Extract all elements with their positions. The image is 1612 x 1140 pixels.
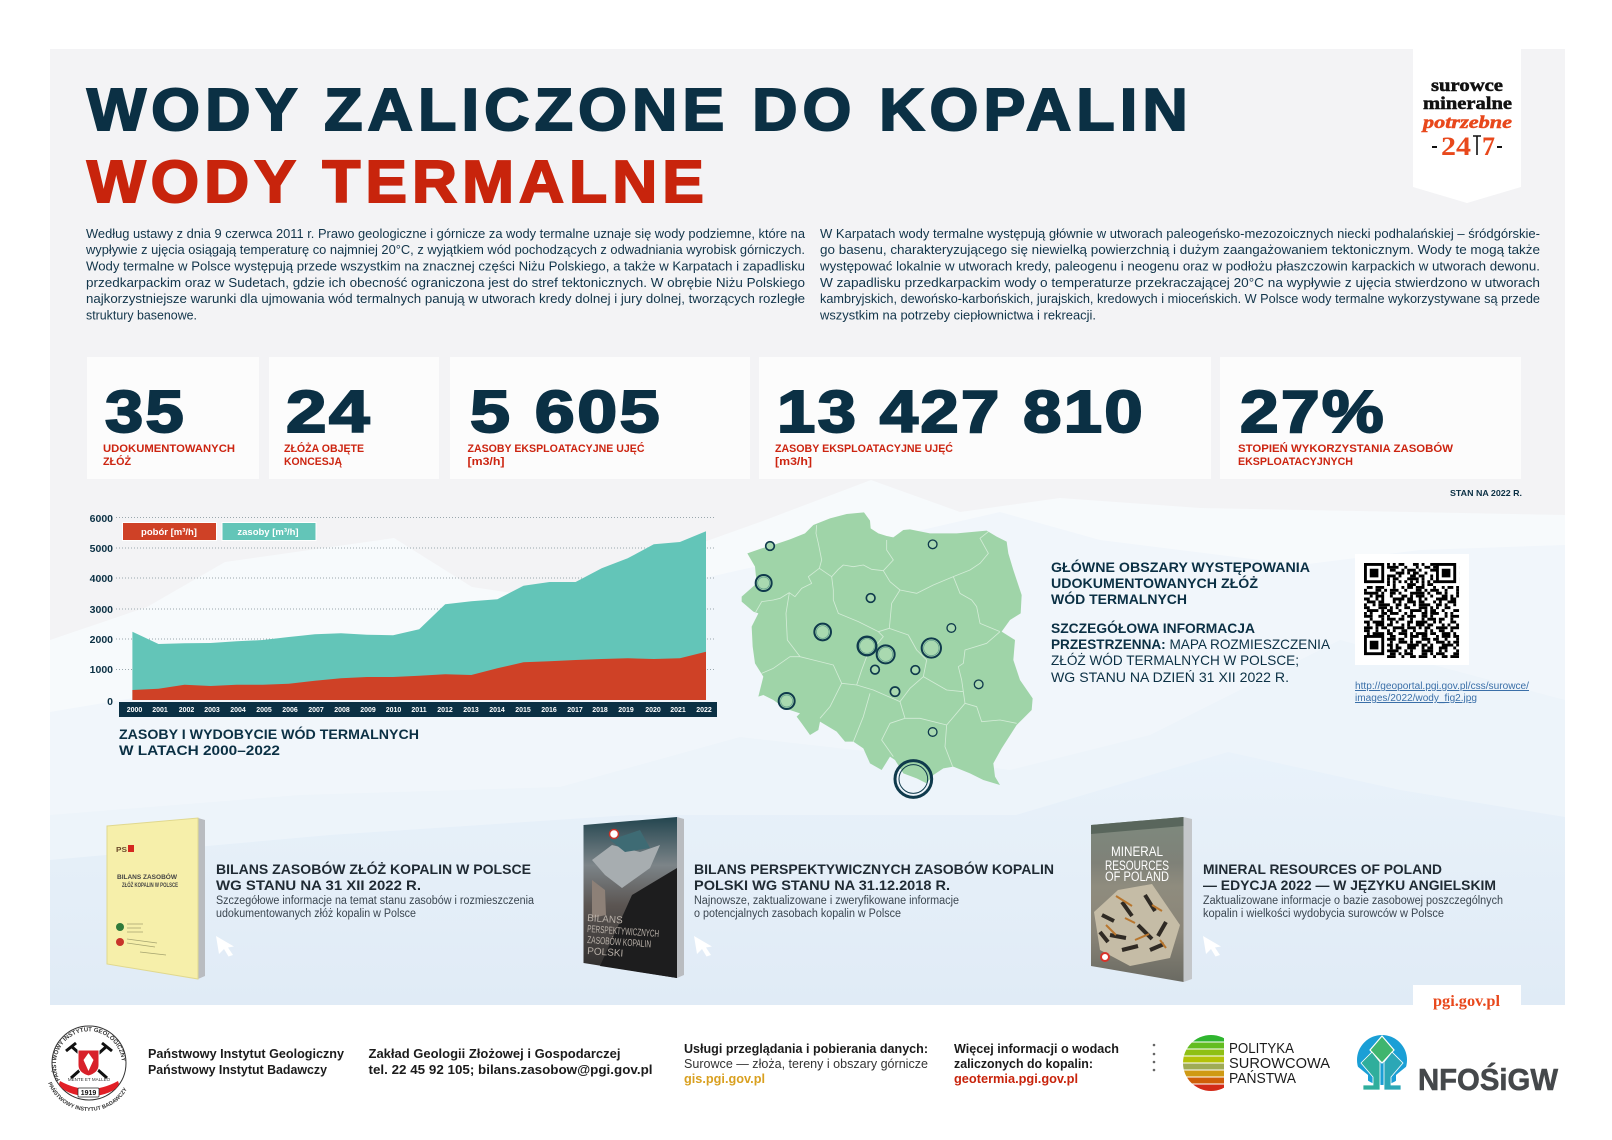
map description: UDOKUMENTOWANYCH ZŁÓŻ [1051, 574, 1258, 591]
stat card: 35: ZŁÓŻ [103, 455, 131, 468]
series: pobor [132, 652, 706, 700]
x axis band: 2002 [179, 707, 194, 714]
book 3 description: kopalin i wielkości wydobycia surowców w Polsce [1203, 908, 1444, 920]
legend [122, 522, 316, 540]
book 3: Mineral Resources of Poland: RESOURCES [1105, 858, 1169, 873]
title [87, 77, 1193, 215]
logo: Polityka Surowcowa Państwa [1180, 1035, 1330, 1092]
footer: department [368, 1047, 652, 1077]
stat card: 5 605: ZASOBY EKSPLOATACYJNE UJĘĆ [468, 442, 645, 455]
book 1 description [216, 860, 535, 920]
x axis band: 2001 [152, 707, 168, 714]
x axis band: 2016 [541, 707, 557, 714]
book 2 description: o potencjalnych zasobach kopalin w Polsce [694, 908, 901, 920]
stat card: 27%: EKSPLOATACYJNYCH [1238, 456, 1353, 468]
book 3 description: — EDYCJA 2022 — W JĘZYKU ANGIELSKIM [1203, 877, 1496, 893]
x axis band: 2006 [282, 707, 298, 714]
text block: left column [85, 227, 805, 322]
legend: pobór [m³/h] [141, 527, 197, 538]
footer: institute: Państwowy Instytut Geologiczny [148, 1047, 344, 1061]
text block: right column: występować lokalnie w utworach kredy, paleogenu i neogenu oraz w podłożu płaszczowin karpackich w utworach dewonu. [819, 260, 1540, 274]
tab: pgi.gov.pl [1413, 985, 1521, 1010]
x axis band: 2000 [127, 707, 142, 714]
logo: PGI emblem: 1919 [81, 1090, 96, 1097]
text block: right column: wszystkim na potrzeby ciepłownictwa i rekreacji. [819, 308, 1096, 322]
book 1: Bilans zasobów: ZŁÓŻ KOPALIN W POLSCE [122, 880, 178, 889]
book 1: Bilans zasobów: BILANS ZASOBÓW [117, 872, 178, 881]
stat card: 5 605 [450, 357, 750, 479]
logo: surowce mineralne potrzebne 24/7 bookmark: surowce [1431, 75, 1503, 95]
grid lines and y axis labels: 5000 [90, 543, 113, 555]
icon: cursor 3 [1203, 936, 1221, 956]
chart title: W LATACH 2000–2022 [119, 742, 280, 758]
map description: PRZESTRZENNA: MAPA ROZMIESZCZENIA [1051, 636, 1331, 652]
logo: PGI emblem: MENTE ET MALLEO [68, 1077, 111, 1082]
logo: Polityka Surowcowa Państwa: POLITYKA [1229, 1040, 1294, 1057]
stat card: 24: KONCESJĄ [284, 456, 342, 468]
book 1 description: BILANS ZASOBÓW ZŁÓŻ KOPALIN W POLSCE [216, 860, 531, 877]
stat card: 27%: STOPIEŃ WYKORZYSTANIA ZASOBÓW [1238, 442, 1454, 455]
footer: more info: zaliczonych do kopalin: [954, 1057, 1093, 1071]
map description: SZCZEGÓŁOWA INFORMACJA [1051, 619, 1255, 636]
text block: left column: przedkarpackim oraz w Sudetach, gdzie ich obecność ograniczona jest do stref tektonicznych. W obrębie Niżu Polskiego [86, 276, 805, 290]
chart title: ZASOBY I WYDOBYCIE WÓD TERMALNYCH [119, 725, 419, 742]
footer: institute [148, 1047, 344, 1077]
book 2: Bilans perspektywicznych: ZASOBÓW KOPALIN [587, 933, 652, 950]
logo: surowce mineralne potrzebne 24/7 bookmark: potrzebne [1421, 112, 1512, 132]
footer: data services: Surowce — złoża, tereny i obszary górnicze [684, 1057, 928, 1071]
footer: more info: geotermia.pgi.gov.pl [954, 1072, 1078, 1086]
text block: left column: wypływie z ujęcia osiągają temperaturę co najmniej 20°C, z wyjątkiem wód pochodzących z odwadniania wyrobisk górniczych. [85, 243, 805, 257]
map description: WÓD TERMALNYCH [1051, 590, 1187, 607]
book 3 description: Zaktualizowane informacje o bazie zasobowej poszczególnych [1203, 895, 1503, 907]
chart title [119, 725, 419, 758]
grid lines and y axis labels: 0 [107, 696, 113, 708]
logo: PGI emblem [48, 1026, 126, 1111]
text block: right column: W zapadlisku przedkarpackim wody o temperaturze przekraczającej 20°C na wypływie z ujęcia stwierdzono w utworach [820, 276, 1540, 290]
icon: cursor 1 [216, 936, 234, 956]
book 2 description: BILANS PERSPEKTYWICZNYCH ZASOBÓW KOPALIN [694, 860, 1054, 877]
footer: department: Zakład Geologii Złożowej i Gospodarczej [368, 1047, 620, 1061]
text block: left column: struktury basenowe. [86, 308, 197, 322]
footer: more info: Więcej informacji o wodach [954, 1042, 1119, 1056]
QR link [1355, 681, 1529, 704]
map of Poland [742, 512, 1033, 797]
book 2 description: Najnowsze, zaktualizowane i zweryfikowane informacje [694, 895, 959, 907]
logo: surowce mineralne potrzebne 24/7 bookmark: mineralne [1423, 93, 1512, 113]
stat card: 35: UDOKUMENTOWANYCH [103, 443, 235, 455]
x axis band: 2007 [308, 707, 324, 714]
logo: NFOŚiGW: NFOŚiGW [1418, 1061, 1559, 1097]
logo: Polityka Surowcowa Państwa: PAŃSTWA [1229, 1070, 1296, 1087]
stat card: 5 605: 5 605 [470, 379, 662, 445]
map markers [756, 540, 983, 797]
x axis band: 2021 [670, 707, 686, 714]
text block: left column: Wody termalne w Polsce występują przede wszystkim na znacznej części Niżu Polskiego, a także w Karpatach i zapadlisku [86, 260, 805, 274]
text block: right column [819, 227, 1540, 322]
text block: right column: kambryjskich, dewońsko-karbońskich, jurajskich, kredowych i mioceńskich. W Polsce wody termalne wykorzystywane są przede [820, 292, 1540, 306]
text block: left column: Według ustawy z dnia 9 czerwca 2011 r. Prawo geologiczne i górnicze za wody termalne uznaje się wody podziemne, które na [86, 227, 805, 241]
book 1 description: WG STANU NA 31 XII 2022 R. [216, 877, 421, 893]
footer: data services: gis.pgi.gov.pl [684, 1072, 765, 1086]
book 2 description [694, 860, 1054, 920]
x axis band: 2019 [618, 707, 634, 714]
book 2 description: POLSKI WG STANU NA 31.12.2018 R. [694, 877, 950, 893]
book 2: Bilans perspektywicznych: BILANS [587, 913, 623, 926]
text block: right column: W Karpatach wody termalne występują głównie w utworach paleogeńsko-mezozoicznych niecki podhalańskiej – śródgórskie- [820, 227, 1540, 241]
book 1: Bilans zasobów: PS [116, 847, 127, 854]
QR code [1355, 554, 1469, 665]
QR link: images/2022/wody_fig2.jpg [1355, 693, 1477, 704]
footer: more info [954, 1042, 1119, 1086]
logo: NFOŚiGW [1357, 1035, 1559, 1097]
stat card: 5 605: [m3/h] [468, 456, 505, 468]
logo: surowce mineralne potrzebne 24/7 bookmark: 7 [1482, 132, 1495, 161]
stat card: 27%: 27% [1240, 379, 1386, 445]
book 3 description: MINERAL RESOURCES OF POLAND [1203, 861, 1442, 877]
text block: right column: go basenu, charakteryzującego się niewielką powierzchnią i dużym zaangażowaniem tektonicznym. Wody te mogą także [820, 243, 1540, 257]
book 2: Bilans perspektywicznych: PERSPEKTYWICZNYCH [587, 924, 659, 940]
stat card: 24: ZŁÓŻA OBJĘTE [284, 442, 364, 455]
book 3: Mineral Resources of Poland: MINERAL [1111, 844, 1163, 859]
x axis band: 2014 [489, 707, 505, 714]
map description: WG STANU NA DZIEŃ 31 XII 2022 R. [1051, 669, 1289, 685]
book 1 description: udokumentowanych złóż kopalin w Polsce [216, 908, 416, 920]
stat card: 24: 24 [286, 379, 372, 445]
x axis band: 2013 [463, 707, 479, 714]
grid lines and y axis labels: 6000 [90, 513, 113, 525]
series: zasoby [132, 531, 706, 700]
title: WODY ZALICZONE DO KOPALIN [87, 77, 1193, 143]
book 2: Bilans perspektywicznych [584, 817, 684, 978]
grid lines and y axis labels: 1000 [90, 664, 113, 676]
map description: ZŁÓŻ WÓD TERMALNYCH W POLSCE; [1051, 651, 1299, 668]
logo: PGI emblem: PAŃSTWOWY INSTYTUT GEOLOGICZNY [51, 1027, 126, 1082]
x axis band: 2015 [515, 707, 531, 714]
background panel with mountains [50, 49, 1565, 1005]
x axis band: 2010 [386, 707, 401, 714]
book 2: Bilans perspektywicznych: POLSKI [587, 946, 624, 960]
x axis band [119, 702, 717, 717]
title: WODY TERMALNE [87, 149, 709, 215]
logo: surowce mineralne potrzebne 24/7 bookmark [1413, 49, 1521, 203]
x axis band: 2018 [592, 707, 608, 714]
map description [1051, 558, 1331, 685]
logo: surowce mineralne potrzebne 24/7 bookmark: 24 [1441, 132, 1471, 161]
icon: cursor 2 [694, 936, 712, 956]
x axis band: 2009 [360, 707, 376, 714]
stat card: 24 [269, 357, 439, 479]
stat card: 13 427 810: ZASOBY EKSPLOATACYJNE UJĘĆ [775, 442, 953, 455]
stat card: 13 427 810: 13 427 810 [777, 379, 1145, 445]
stat card: 35 [87, 357, 259, 479]
logo: Polityka Surowcowa Państwa: SUROWCOWA [1229, 1055, 1330, 1072]
legend: zasoby [m³/h] [237, 527, 299, 538]
area chart [90, 513, 717, 717]
x axis band: 2012 [437, 707, 453, 714]
grid lines and y axis labels: 2000 [90, 634, 113, 646]
x axis band: 2020 [645, 707, 661, 714]
logo: PGI emblem: PAŃSTWOWY INSTYTUT BADAWCZY [48, 1082, 126, 1111]
grid lines and y axis labels: 3000 [90, 604, 113, 616]
QR link: http://geoportal.pgi.gov.pl/css/surowce/ [1355, 681, 1529, 692]
map description: GŁÓWNE OBSZARY WYSTĘPOWANIA [1051, 558, 1310, 575]
book 3 description [1203, 861, 1503, 920]
footer: data services [684, 1042, 928, 1086]
stat card: 13 427 810: [m3/h] [775, 456, 812, 468]
grid lines and y axis labels: 4000 [90, 573, 113, 585]
footer: department: tel. 22 45 92 105; bilans.zasobow@pgi.gov.pl [368, 1063, 652, 1077]
stat card: 27% [1220, 357, 1521, 479]
book 3: Mineral Resources of Poland [1091, 817, 1192, 982]
x axis band: 2005 [256, 707, 272, 714]
x axis band: 2008 [334, 707, 350, 714]
note: stan na 2022: STAN NA 2022 R. [1450, 488, 1522, 498]
x axis band: 2017 [567, 707, 583, 714]
stat card: 13 427 810 [759, 357, 1211, 479]
tab: pgi.gov.pl: pgi.gov.pl [1433, 993, 1501, 1010]
book 1: Bilans zasobów [107, 818, 205, 979]
x axis band: 2022 [696, 707, 712, 714]
x axis band: 2011 [411, 707, 427, 714]
book 3: Mineral Resources of Poland: OF POLAND [1105, 869, 1169, 884]
x axis band: 2003 [204, 707, 220, 714]
text block: left column: najkorzystniejsze warunki dla ujmowania wód termalnych panują w utworach kredy dolnej i jury dolnej, tworzących rozległe [86, 292, 805, 306]
x axis band: 2004 [230, 707, 246, 714]
book 1 description: Szczegółowe informacje na temat stanu zasobów i rozmieszczenia [216, 895, 535, 907]
footer: data services: Usługi przeglądania i pobierania danych: [684, 1042, 928, 1056]
footer dots [1153, 1044, 1155, 1071]
stat card: 35: 35 [105, 379, 186, 445]
footer: institute: Państwowy Instytut Badawczy [148, 1063, 327, 1077]
grid lines and y axis labels [90, 513, 716, 708]
